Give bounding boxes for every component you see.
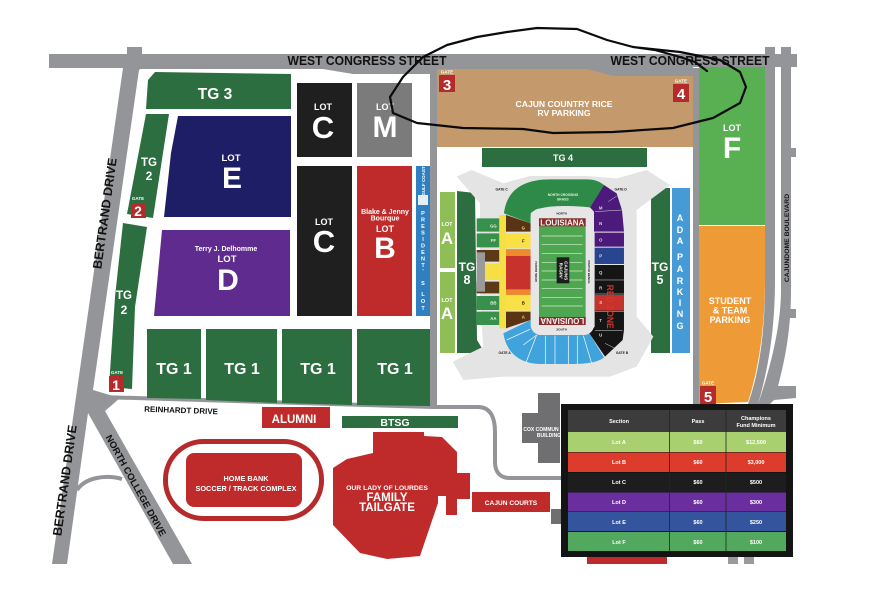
panel: TG 5: 5 bbox=[657, 273, 664, 287]
panel: Lot F bbox=[699, 67, 765, 225]
row: Lot E: $60 bbox=[693, 520, 703, 526]
stadium labels: FF bbox=[491, 238, 496, 243]
panel: TG 8 bbox=[457, 191, 483, 353]
panel: TG 3 bbox=[146, 72, 291, 109]
stadium labels: G bbox=[522, 225, 526, 230]
football field bbox=[539, 218, 586, 325]
panel: Home Bank Soccer / Track Complex bbox=[166, 442, 322, 518]
stadium labels: GATE C bbox=[495, 188, 508, 192]
panel: President's Lot: D bbox=[421, 244, 425, 250]
row: Lot A: $12,500 bbox=[746, 440, 766, 446]
panel: Lot C south bbox=[297, 166, 352, 316]
stadium labels: Q bbox=[599, 270, 603, 275]
row: Lot B: $60 bbox=[693, 460, 703, 466]
stadium labels: AA bbox=[490, 316, 497, 321]
panel: Lot B: LOT bbox=[376, 224, 394, 234]
panel: President's Lot: N bbox=[421, 256, 425, 262]
panel: Our Lady of Lourdes Family Tailgate: TAILGATE bbox=[359, 502, 415, 514]
panel: ADA Parking: G bbox=[676, 321, 684, 331]
table header: Champions bbox=[741, 416, 771, 422]
panel: Lot A lower bbox=[440, 272, 455, 353]
row: Lot B: Lot B bbox=[612, 460, 626, 466]
road label: West Congress Street right: WEST CONGRESS STREET bbox=[610, 53, 770, 68]
panel: Lot F: F bbox=[723, 132, 741, 165]
panel: Lot A upper bbox=[440, 192, 455, 268]
panel: ADA Parking: A bbox=[677, 264, 684, 274]
panel: ADA Parking: P bbox=[677, 252, 683, 262]
stadium labels bbox=[490, 188, 629, 355]
stadium labels: GATE A bbox=[499, 351, 511, 355]
panel: TG 8: 8 bbox=[464, 273, 471, 287]
panel: Cajun Courts: CAJUN COURTS bbox=[485, 500, 538, 507]
panel: ADA Parking: D bbox=[677, 225, 684, 235]
panel: TG 2 upper bbox=[127, 114, 169, 218]
panel: Our Lady of Lourdes Family Tailgate bbox=[333, 432, 470, 559]
panel: ADA Parking: K bbox=[677, 287, 684, 297]
stadium labels: N bbox=[599, 221, 602, 226]
panel: Lot D: LOT bbox=[218, 254, 237, 265]
panel: Our Lady of Lourdes Family Tailgate: FAMILY bbox=[366, 492, 408, 504]
icon: gate 5: 5 bbox=[704, 389, 712, 406]
panel: President's Lot: ' bbox=[422, 269, 424, 275]
stadium labels: T bbox=[599, 318, 602, 323]
panel: TG 1 first bbox=[147, 329, 201, 399]
icon: gate 4: 4 bbox=[677, 86, 686, 103]
panel: Student and Team Parking: STUDENT bbox=[709, 296, 752, 306]
panel: President's Lot: S bbox=[421, 230, 425, 236]
north end zone text: LOUISIANA bbox=[540, 218, 585, 227]
chart: stadium seating bbox=[453, 170, 670, 380]
panel: Lot C north: LOT bbox=[314, 102, 332, 112]
panel: Cajun Courts bbox=[472, 492, 550, 512]
icon: gate 5: GATE bbox=[702, 380, 714, 386]
panel: Lot E: E bbox=[222, 162, 242, 195]
icon: gate 3: 3 bbox=[443, 77, 451, 94]
row: Lot B: $3,000 bbox=[748, 460, 764, 466]
stadium labels: GG bbox=[490, 223, 497, 228]
seating: south blue sections bbox=[503, 320, 604, 364]
stadium labels: B bbox=[522, 301, 525, 306]
stadium labels: GRASS bbox=[557, 198, 569, 202]
panel: President's Lot: GULF COAST bbox=[421, 166, 426, 196]
row: Lot B bbox=[568, 452, 786, 472]
icon: gate 3 bbox=[439, 70, 455, 94]
panel: Lot C south: C bbox=[313, 224, 335, 259]
panel: Lot F: LOT bbox=[723, 123, 741, 133]
panel: TG 1 first: TG 1 bbox=[156, 361, 192, 378]
midfield logo: CAJUNS bbox=[563, 261, 568, 280]
icon: gate 3: GATE bbox=[441, 70, 453, 74]
panel: BTSG bbox=[342, 416, 458, 429]
panel: President's Lot: S bbox=[421, 281, 425, 287]
panel: Lot A upper: A bbox=[441, 229, 453, 248]
panel: Cox Communications Building bbox=[522, 393, 561, 463]
south end zone text: LOUISIANA bbox=[540, 316, 584, 325]
panel: Lot C south: LOT bbox=[315, 217, 333, 227]
panel: Lot M: LOT bbox=[376, 102, 394, 112]
panel: Lot B bbox=[357, 166, 412, 316]
seating: east purple sections bbox=[590, 185, 624, 232]
panel: Home Bank Soccer / Track Complex: HOME BANK bbox=[224, 474, 269, 483]
stadium labels: A bbox=[522, 315, 526, 320]
panel: TG 2 lower: TG bbox=[116, 290, 132, 302]
row: Lot F: Lot F bbox=[612, 540, 626, 546]
table header bbox=[568, 410, 786, 432]
panel: Lot A upper: LOT bbox=[442, 222, 453, 228]
panel: TG 1 fourth bbox=[357, 329, 430, 406]
panel: President's Lot: P bbox=[421, 211, 425, 217]
panel: TG 5: TG bbox=[652, 260, 668, 274]
panel: Lot B: Bourque bbox=[371, 216, 399, 222]
panel: Cajun Country Rice RV Parking bbox=[437, 69, 693, 147]
stadium labels: S bbox=[599, 300, 602, 305]
stadium labels: SOUTH bbox=[556, 327, 567, 331]
panel: Student and Team Parking: PARKING bbox=[710, 315, 750, 325]
panel: President's Lot: E bbox=[421, 224, 425, 230]
stadium labels: M bbox=[599, 205, 603, 210]
hand-drawn ink circle bbox=[390, 28, 746, 133]
panel: Student and Team Parking: & TEAM bbox=[713, 306, 747, 316]
icon: gate 1 bbox=[109, 370, 124, 393]
panel: ADA Parking: A bbox=[677, 236, 684, 246]
stadium labels: U bbox=[599, 333, 602, 338]
stadium labels: GATE D bbox=[614, 188, 627, 192]
row: Lot F: $60 bbox=[693, 540, 703, 546]
panel: Cox Communications Building: COX COMMUN bbox=[523, 427, 559, 433]
stadium labels: GATE B bbox=[616, 351, 629, 355]
panel: TG 8: TG bbox=[459, 260, 475, 274]
panel: TG 4 bbox=[482, 148, 647, 167]
table header: Pass bbox=[692, 419, 704, 425]
panel: TG 1 second bbox=[206, 329, 277, 403]
panel: BTSG: BTSG bbox=[380, 417, 410, 429]
panel: TG 2 upper: TG bbox=[141, 157, 157, 169]
panel: TG 2 upper: 2 bbox=[146, 169, 153, 183]
panel: Lot D: Terry J. Delhomme bbox=[195, 246, 257, 253]
icon: gate 5 bbox=[700, 380, 716, 406]
icon: gate 1: 1 bbox=[112, 377, 120, 393]
panel: Lot E bbox=[164, 116, 291, 217]
panel: Our Lady of Lourdes Family Tailgate: OUR LADY OF LOURDES bbox=[346, 485, 428, 492]
row: Lot C bbox=[568, 473, 786, 492]
panel: Cajun Country Rice RV Parking: CAJUN COUNTRY RICE bbox=[516, 99, 613, 109]
panel: ADA Parking bbox=[672, 188, 690, 353]
panel: TG 1 third: TG 1 bbox=[300, 361, 336, 378]
panel: President's Lot bbox=[416, 166, 430, 316]
panel: TG 4: TG 4 bbox=[553, 153, 573, 163]
panel: Lot C north: C bbox=[312, 110, 334, 145]
panel: Cajun Country Rice RV Parking: RV PARKING bbox=[537, 108, 591, 118]
panel: Lot A lower: A bbox=[441, 304, 453, 323]
table header: Section bbox=[609, 419, 630, 425]
table header: Fund Minimum bbox=[736, 423, 776, 429]
row: Lot F bbox=[568, 532, 786, 551]
panel: ADA Parking: R bbox=[677, 276, 684, 286]
road label: Reinhardt Drive: REINHARDT DRIVE bbox=[144, 405, 219, 416]
icon: gate 2 bbox=[131, 196, 146, 219]
stadium labels: O bbox=[599, 237, 603, 242]
icon: gate 2: 2 bbox=[134, 203, 142, 219]
stadium labels: P bbox=[599, 253, 602, 258]
panel: Lot M: M bbox=[372, 111, 398, 144]
panel: President's Lot: R bbox=[421, 218, 425, 224]
row: Lot D: $60 bbox=[693, 500, 703, 506]
panel: ADA Parking: A bbox=[677, 213, 684, 223]
north end zone seating bbox=[504, 179, 604, 223]
row: Lot A: Lot A bbox=[612, 440, 626, 446]
road label: West Congress Street left: WEST CONGRESS STREET bbox=[288, 53, 447, 68]
field surround bbox=[531, 208, 594, 335]
panel: TG 3: TG 3 bbox=[198, 86, 233, 103]
stadium labels: BB bbox=[490, 301, 496, 306]
row: Lot C: $500 bbox=[750, 480, 762, 486]
row: Lot F: $100 bbox=[750, 540, 762, 546]
panel: TG 2 lower bbox=[109, 223, 147, 389]
row: Lot C: Lot C bbox=[612, 480, 626, 486]
stadium labels: VISITOR BENCH bbox=[587, 260, 591, 283]
panel: ADA Parking: N bbox=[677, 309, 683, 319]
panel: Home Bank Soccer / Track Complex: SOCCER / TRACK COMPLEX bbox=[196, 484, 297, 493]
row: Lot A: $60 bbox=[693, 440, 703, 446]
row: Lot A bbox=[568, 432, 786, 452]
panel: pricing table bbox=[561, 404, 793, 557]
icon: gate 1: GATE bbox=[111, 370, 123, 375]
panel: TG 2 lower: 2 bbox=[121, 303, 128, 317]
panel: Lot B: Blake & Jenny bbox=[361, 209, 409, 216]
row: Lot C: $60 bbox=[693, 480, 703, 486]
road label: Cajundome Boulevard: CAJUNDOME BOULEVARD bbox=[784, 194, 791, 282]
panel: Alumni: ALUMNI bbox=[272, 414, 316, 426]
panel: Lot C north bbox=[297, 83, 352, 157]
panel: TG 1 fourth: TG 1 bbox=[377, 361, 413, 378]
row: Lot D: $300 bbox=[750, 500, 762, 506]
stadium labels: F bbox=[522, 239, 525, 244]
stadium labels: NORTH bbox=[556, 212, 567, 216]
road label: Bertrand Drive upper: BERTRAND DRIVE bbox=[90, 157, 120, 270]
row: Lot E: Lot E bbox=[612, 520, 626, 526]
panel: President's Lot: T bbox=[421, 306, 425, 312]
icon: gate 4 bbox=[673, 78, 689, 103]
panel: President's Lot: E bbox=[421, 250, 425, 256]
stadium labels: HOME BENCH bbox=[534, 261, 538, 282]
stadium labels: R bbox=[599, 285, 603, 290]
stadium labels: NORTH CROSSING bbox=[548, 193, 579, 197]
row: Lot E: $250 bbox=[750, 520, 762, 526]
panel: President's Lot: O bbox=[421, 299, 426, 305]
panel: Lot E: LOT bbox=[222, 153, 241, 164]
panel: Lot A lower: LOT bbox=[442, 298, 453, 304]
panel: Lot D: D bbox=[217, 264, 239, 297]
panel: President's Lot: L bbox=[421, 292, 425, 298]
panel: Lot B: B bbox=[374, 232, 396, 265]
panel: ADA Parking: I bbox=[679, 298, 681, 308]
panel: TG 1 third bbox=[282, 329, 352, 405]
icon: gate 2: GATE bbox=[132, 196, 144, 201]
red zone text: RED ZONE bbox=[605, 285, 615, 329]
panel: Alumni bbox=[262, 407, 330, 428]
panel: Lot M bbox=[357, 83, 412, 157]
road label: Bertrand Drive lower: BERTRAND DRIVE bbox=[50, 424, 80, 537]
midfield logo: RAGIN' bbox=[559, 263, 564, 279]
panel: President's Lot: I bbox=[422, 237, 424, 243]
panel: TG 5 bbox=[651, 188, 670, 353]
panel: Student and Team Parking bbox=[699, 226, 765, 404]
road label: North College Drive: NORTH COLLEGE DRIVE bbox=[103, 433, 168, 538]
panel: TG 1 second: TG 1 bbox=[224, 361, 260, 378]
icon: gate 4: GATE bbox=[675, 78, 687, 84]
row: Lot D bbox=[568, 492, 786, 512]
panel: Cox Communications Building: BUILDING bbox=[537, 433, 561, 439]
row: Lot D: Lot D bbox=[612, 500, 626, 506]
panel: road network bbox=[49, 47, 797, 564]
row: Lot E bbox=[568, 512, 786, 531]
midfield logo bbox=[557, 257, 569, 283]
seating: west lower bbox=[499, 215, 506, 328]
seating: west green upper bbox=[477, 218, 499, 325]
panel: President's Lot: T bbox=[421, 263, 425, 269]
panel: Lot D bbox=[154, 230, 290, 316]
